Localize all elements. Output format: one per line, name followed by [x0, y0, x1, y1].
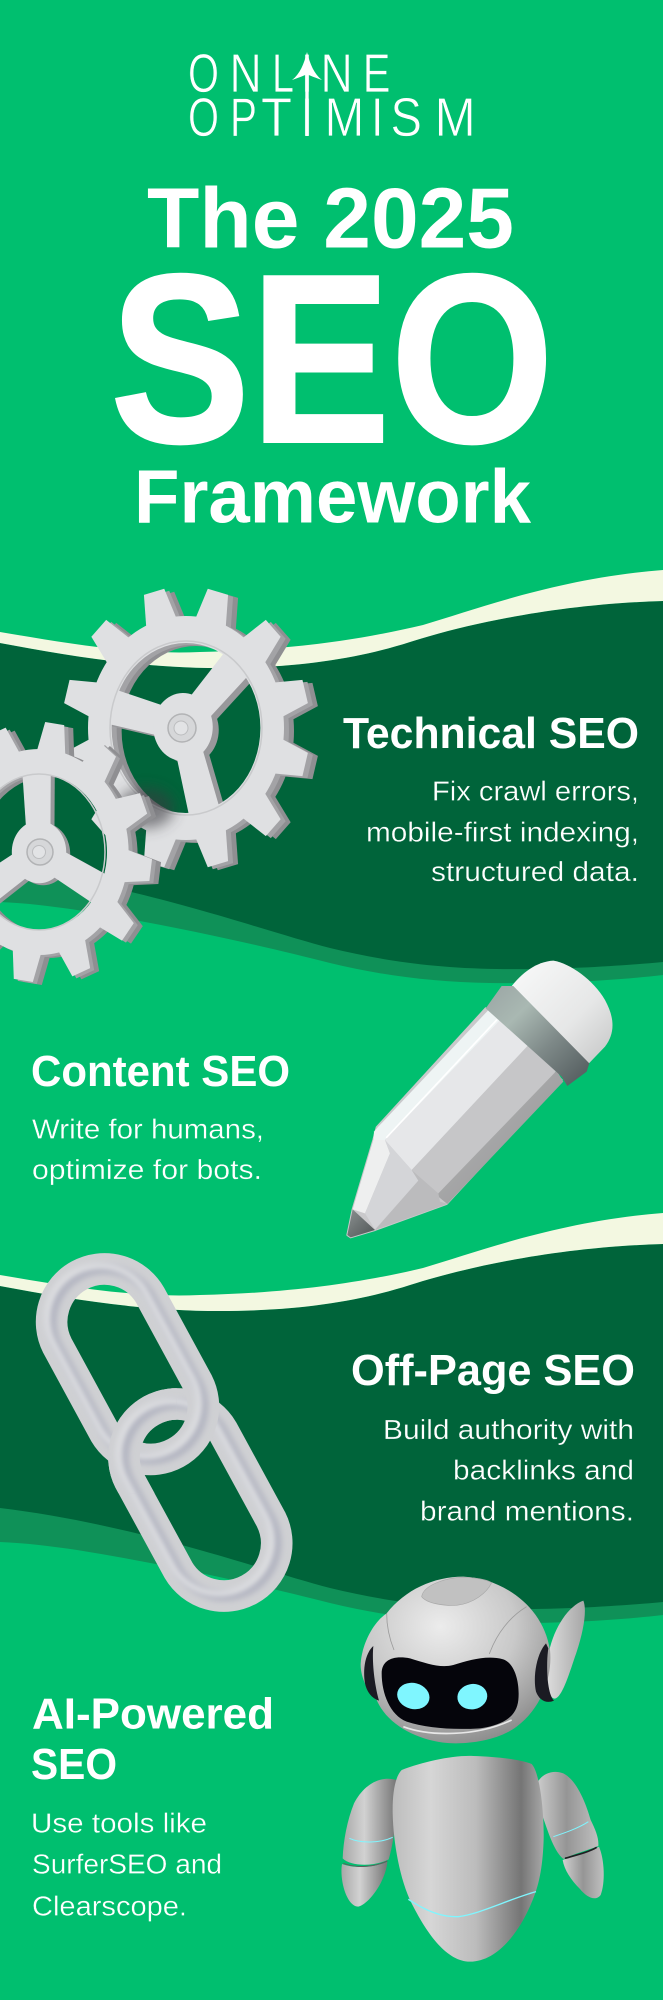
body text: AI-Powered SEO — [31, 1808, 222, 1921]
chain link: lower — [119, 1401, 277, 1596]
robot visor — [382, 1657, 519, 1729]
body text: Off-Page SEO: Build authority with — [383, 1414, 634, 1445]
chain link: overlapping segment — [108, 1388, 177, 1494]
icon: pencil — [347, 961, 612, 1237]
body text: Technical SEO: structured data. — [431, 856, 639, 887]
body text: Technical SEO — [366, 776, 639, 887]
logo word: Online: N — [321, 43, 353, 104]
heading: AI-Powered SEO — [31, 1690, 274, 1789]
pencil body mid facet — [412, 1043, 557, 1193]
pencil cone top facet — [353, 1140, 390, 1213]
robot left eye — [394, 1679, 432, 1713]
pencil body low facet — [438, 1071, 563, 1204]
title line: SEO: SEO — [110, 225, 554, 494]
body text: Technical SEO: Fix crawl errors, — [432, 776, 639, 807]
logo word: Online: O — [188, 43, 219, 104]
icon: logo arrow — [292, 52, 322, 136]
text: AI-Powered SEO — [31, 1690, 274, 1921]
body text: Off-Page SEO — [383, 1414, 634, 1526]
robot head seams — [387, 1607, 527, 1654]
body text: Content SEO — [32, 1113, 264, 1185]
logo word: Optimism: I — [301, 87, 313, 148]
pencil edge highlight — [387, 1020, 497, 1137]
title — [110, 172, 554, 540]
robot fin ear — [547, 1601, 585, 1699]
heading: AI-Powered SEO: SEO — [31, 1740, 117, 1789]
robot right ear — [535, 1643, 554, 1702]
logo word: Online: E — [363, 43, 390, 104]
logo word: Online: I — [301, 43, 313, 104]
icon: chain link — [47, 1266, 277, 1596]
panel: technical SEO wave band — [0, 570, 663, 983]
title line: The 2025: The 2025 — [147, 172, 514, 266]
logo word: Optimism: I — [371, 87, 384, 148]
heading: Technical SEO: Technical SEO — [343, 709, 639, 758]
gear: small — [0, 708, 174, 999]
text: Technical SEO — [343, 709, 639, 887]
body text: Content SEO: Write for humans, — [32, 1113, 264, 1144]
panel: off-page SEO wave band — [0, 1213, 663, 1623]
body text: Content SEO: optimize for bots. — [32, 1154, 262, 1185]
pencil body main facet — [385, 1018, 530, 1170]
logo word: Optimism: M — [325, 87, 364, 148]
body text: Off-Page SEO: backlinks and — [453, 1455, 634, 1486]
logo word: Optimism: O — [188, 87, 219, 148]
icon: gears — [0, 587, 319, 999]
pencil cone low facet — [375, 1170, 447, 1230]
logo word: Online: L — [272, 43, 294, 104]
pencil band — [486, 986, 589, 1086]
body text: AI-Powered SEO: Clearscope. — [32, 1890, 187, 1921]
robot chin highlight — [403, 1720, 512, 1733]
chain link: upper — [47, 1266, 203, 1459]
pencil cap — [510, 961, 612, 1064]
body text: AI-Powered SEO: Use tools like — [31, 1808, 207, 1839]
robot body light line — [408, 1892, 536, 1917]
gear: large — [63, 587, 319, 872]
heading: AI-Powered SEO: AI-Powered — [32, 1690, 274, 1739]
body text: Technical SEO: mobile-first indexing, — [366, 817, 639, 848]
pencil silhouette — [347, 1008, 562, 1237]
logo word: Optimism: S — [390, 87, 422, 148]
body text: Off-Page SEO: brand mentions. — [420, 1495, 634, 1526]
logo word: Online: N — [230, 43, 262, 104]
text: Off-Page SEO — [351, 1346, 635, 1526]
robot right arm — [535, 1772, 604, 1898]
body text: AI-Powered SEO: SurferSEO and — [32, 1848, 222, 1880]
text: Content SEO — [31, 1047, 290, 1185]
logo: Online Optimism — [188, 43, 476, 148]
robot top plate — [422, 1577, 492, 1605]
robot body — [393, 1756, 544, 1962]
logo word: Optimism: T — [261, 87, 292, 148]
heading: Off-Page SEO: Off-Page SEO — [351, 1346, 635, 1395]
logo word: Optimism: P — [230, 87, 257, 148]
pencil cone middle facet — [365, 1140, 418, 1229]
heading: Content SEO: Content SEO — [31, 1047, 290, 1096]
pencil body top facet — [373, 1008, 502, 1141]
robot right eye — [455, 1682, 489, 1712]
title line: Framework: Framework — [134, 454, 532, 540]
robot head — [361, 1577, 550, 1743]
robot left arm — [341, 1779, 397, 1907]
pencil lead — [347, 1209, 375, 1237]
robot left ear — [364, 1646, 379, 1701]
logo word: Optimism: M — [435, 87, 476, 148]
icon: robot — [341, 1577, 604, 1962]
